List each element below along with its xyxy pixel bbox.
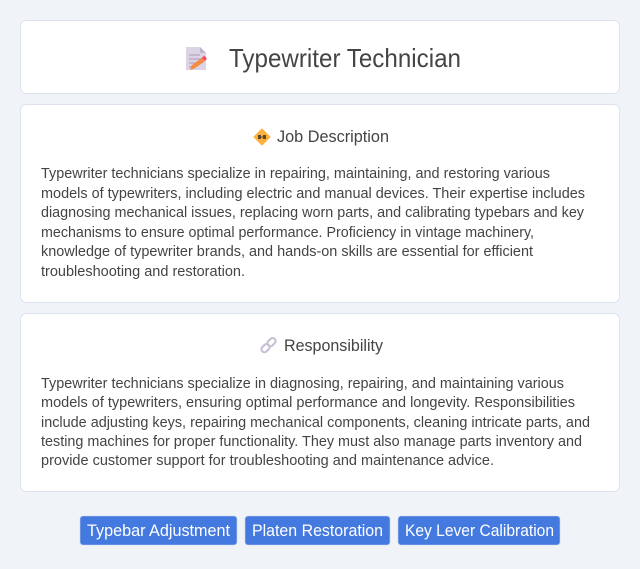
text block: responsibility: models of typewriters, ensuring optimal performance and longevity. Responsibilities [41,395,575,411]
title: Typewriter Technician [229,43,461,73]
text block: job description: troubleshooting and restoration. [41,264,245,280]
text block: responsibility: provide customer support for troubleshooting and maintenance advice. [41,453,494,469]
text block: responsibility: include adjusting keys, repairing mechanical components, cleaning intricate parts, and [41,415,590,431]
tag: typebar adjustment: Typebar Adjustment [87,522,230,540]
heading: job description: Job Description [277,128,389,146]
text block: job description: mechanisms to ensure optimal performance. Proficiency in vintage machinery, [41,225,534,241]
text block: responsibility: Typewriter technicians specialize in diagnosing, repairing, and maintaining various [41,376,564,392]
text block: job description [41,166,585,280]
tag: key lever calibration: Key Lever Calibration [405,522,554,540]
panel: responsibility [20,314,620,492]
tag: platen restoration [245,516,390,545]
icon: document with pencil [186,47,207,70]
text block: responsibility: testing machines for proper functionality. They must also manage parts inventory and [41,434,582,450]
text block: job description: Typewriter technicians specialize in repairing, maintaining, and restoring various [41,166,550,182]
tag: platen restoration: Platen Restoration [252,522,383,540]
panel: job description [20,104,620,302]
text block: job description: diagnosing mechanical issues, replacing worn parts, and calibrating typebars and key [41,205,585,221]
text block: job description: models of typewriters, including electric and manual devices. Their expertise includes [41,186,585,202]
text block: responsibility [41,376,590,469]
text block: job description: knowledge of typewriter brands, and hands-on skills are essential for efficient [41,244,533,260]
icon: chain link [260,337,277,354]
tag: key lever calibration [398,516,560,545]
tag: typebar adjustment [80,516,237,545]
icon: diamond sign [254,129,270,145]
panel: header [20,20,620,94]
heading: responsibility: Responsibility [284,337,384,355]
